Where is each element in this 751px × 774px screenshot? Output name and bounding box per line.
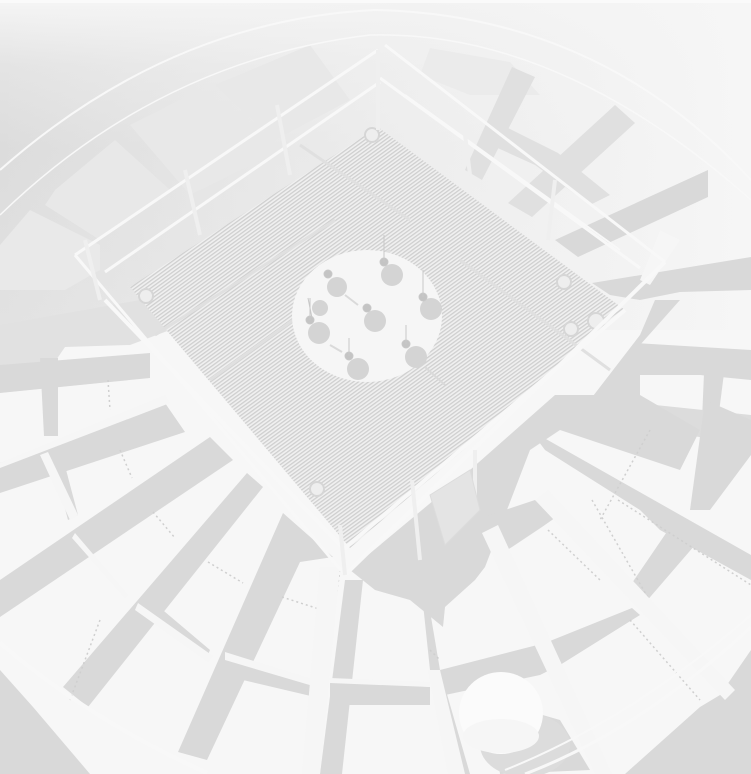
nozzle stems <box>306 235 445 385</box>
access stair <box>430 470 480 545</box>
beams upper right <box>420 48 540 95</box>
beams lower right <box>350 395 700 627</box>
beams left <box>0 353 150 393</box>
upper-left faint tank panels <box>0 45 350 290</box>
nozzle shadows <box>308 264 442 380</box>
platform deck <box>130 127 625 548</box>
bottom-left corner <box>0 670 90 774</box>
platform guard rails <box>75 45 665 575</box>
deck fittings <box>139 128 604 496</box>
light stripes across beams <box>0 230 735 774</box>
rivet lines <box>70 380 751 774</box>
central circular hatch <box>292 235 445 385</box>
storage dome <box>459 672 570 774</box>
